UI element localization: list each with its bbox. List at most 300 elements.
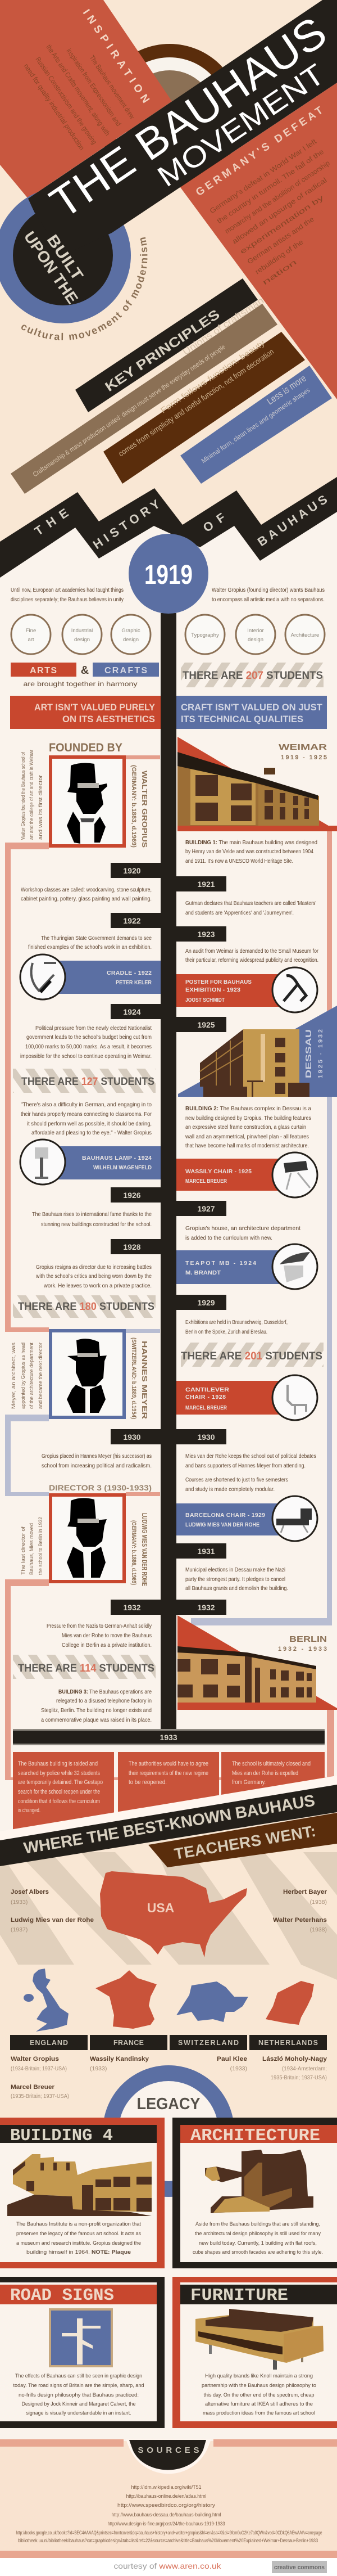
- heading: founded by: FOUNDED BY: [49, 741, 122, 754]
- panel: closure boxes: to be reopened.: [129, 1779, 167, 1786]
- chip: wassily chair: WASSILY CHAIR - 1925: [185, 1168, 252, 1175]
- stat: 201 students: [181, 1343, 324, 1367]
- building 2 text: [185, 1105, 311, 1149]
- text: 1931: Municipal elections in Dessau make the Nazi: [185, 1566, 285, 1573]
- timeline spine: [161, 613, 176, 1735]
- text: 1922: [28, 935, 152, 951]
- names: france: (1933): [90, 2065, 107, 2072]
- country bars: FRANCE: [113, 2039, 144, 2047]
- panel: germany's defeat: nation: [261, 258, 298, 286]
- banner: craft: [176, 696, 327, 729]
- card: architecture: [172, 2118, 337, 2268]
- chip: wassily chair: MARCEL BREUER: [185, 1178, 227, 1185]
- arts and crafts: CRAFTS: [104, 666, 147, 675]
- building 3 text: relegated to a disused telephone factory in: [56, 1697, 152, 1704]
- text: gropius quote: their hands properly means connecting to classrooms. For: [21, 1111, 152, 1118]
- building 3 text: a commemorative plaque was raised in its place.: [41, 1717, 152, 1723]
- year tags left: 1922: [123, 916, 141, 925]
- vertical text: mies notes: the school to Berlin in 1932: [38, 1517, 43, 1575]
- bottom rule: [0, 2551, 337, 2558]
- names: england: [11, 2056, 69, 2100]
- key principles bars: KEY PRINCIPLES: [102, 307, 222, 395]
- chip: bauhaus lamp: BAUHAUS LAMP - 1924: [82, 1155, 152, 1161]
- chip: barcelona chair: [176, 1496, 317, 1541]
- card: building 4: [0, 2118, 165, 2268]
- chip: cantilever chair: CANTILEVER: [185, 1386, 229, 1393]
- text: 1929: Berlin on the Spoke, Zurich and Breslau.: [185, 1328, 267, 1335]
- panel: closure boxes: searched by police while 32 students: [18, 1770, 100, 1777]
- names: switzerland: Paul Klee: [217, 2056, 247, 2062]
- arts and crafts: [11, 663, 159, 688]
- discipline circles: Industrial: [71, 628, 93, 634]
- vertical text: mies notes: Bauhaus, Mies moved: [29, 1523, 34, 1575]
- names: usa left: (1937): [11, 1926, 28, 1933]
- label: weimar: WEIMAR: [279, 742, 327, 752]
- year tags right: 1930: [197, 1433, 215, 1442]
- names: england: (1934-Britain; 1937-USA): [11, 2065, 67, 2072]
- map: france: [95, 1970, 157, 2029]
- vertical text: meyer notes: of the architecture department: [29, 1343, 34, 1409]
- portrait: mies van der rohe: [51, 1495, 124, 1582]
- label: dessau: [304, 1029, 324, 1078]
- hatch backdrop behind map: [0, 1852, 337, 1980]
- year tags left: 1924: [123, 1007, 141, 1016]
- text: source list: http://www.design-is-fine.org/post/24/the-bauhaus-1919-1933: [108, 2521, 225, 2527]
- panel: germany's defeat: [180, 83, 337, 399]
- panel: closure boxes: The authorities would have to agree: [129, 1760, 208, 1767]
- building 2 text: that have become hall marks of modernist architecture.: [185, 1142, 309, 1149]
- chip: poster: EXHIBITION - 1923: [185, 987, 240, 993]
- chip: barcelona chair: BARCELONA CHAIR - 1929: [185, 1512, 265, 1519]
- panel: inspiration: The Bauhaus movement drew: [88, 54, 136, 121]
- title: THE BAUHAUS: [41, 7, 335, 228]
- text: furniture: partnership with the Bauhaus design philosophy to: [202, 2383, 316, 2389]
- text: road signs: no-frills design philosophy that Bauhaus practiced:: [19, 2392, 139, 2398]
- heading band: the history of bauhaus: BAUHAUS: [255, 492, 330, 549]
- text: building 4: a museum and research institute. Gropius designed the: [16, 2240, 141, 2246]
- label: dessau: 1925 - 1932: [317, 1029, 324, 1078]
- names: usa left: Ludwig Mies van der Rohe: [11, 1917, 94, 1924]
- panel: germany's defeat: monarchy and the abolition of censorship: [224, 159, 331, 235]
- discipline circles: design: [123, 637, 139, 643]
- text: gropius quote: "There's also a difficulty in German, and engaging in to: [21, 1101, 152, 1108]
- legacy arch: LEGACY: [137, 2095, 200, 2113]
- banner: art: ON ITS AESTHETICS: [62, 714, 155, 724]
- vertical name: walter gropius: WALTER GROPIUS: [140, 771, 149, 848]
- text: 1930 left: [42, 1453, 152, 1469]
- panel: germany's defeat: GERMANY'S DEFEAT: [194, 105, 325, 199]
- year bar: 1933: 1933: [160, 1733, 177, 1742]
- stat: 114 students: THERE ARE 114 STUDENTS: [18, 1663, 154, 1674]
- panel: inspiration: INSPIRATION: [80, 7, 152, 105]
- vertical name: walter gropius: (GERMANY: b.1883, d.1969): [130, 765, 137, 848]
- text: 1921: and students are 'Apprentices' and 'Journeymen'.: [185, 909, 294, 916]
- text: architecture: new build today. Currently, 1 building with flat roofs,: [199, 2240, 317, 2246]
- vertical text: meyer notes: [11, 1342, 43, 1409]
- vertical text: gropius notes: [20, 750, 43, 840]
- building 3 text: [41, 1688, 152, 1723]
- arts and crafts: &: [81, 664, 89, 677]
- panel: germany's defeat: the country in turmoil. The fall of the: [216, 147, 325, 225]
- stat: 180 students: [13, 1295, 156, 1318]
- text: road signs: [13, 2373, 144, 2416]
- text: 1923: [185, 948, 318, 963]
- panel: closure boxes: The school is ultimately closed and: [232, 1760, 311, 1767]
- text: 1924: [20, 1025, 152, 1060]
- card: road signs: ROAD SIGNS: [10, 2286, 114, 2305]
- year tags left: [111, 863, 161, 1615]
- text: source list: http://www.bauhaus-dessau.de/bauhaus-building.html: [111, 2512, 221, 2518]
- stat: 207 students: THERE ARE 207 STUDENTS: [183, 670, 323, 682]
- panel: inspiration: [0, 0, 172, 199]
- names: netherlands: [262, 2056, 327, 2081]
- stat: 180 students: THERE ARE 180 STUDENTS: [18, 1301, 154, 1313]
- names: netherlands: László Moholy-Nagy: [262, 2056, 327, 2062]
- building: dessau: [178, 1006, 337, 1097]
- text: source list: http://www.speedbirdco.org/org/history: [117, 2502, 216, 2508]
- names: england: Walter Gropius: [11, 2056, 59, 2062]
- card: furniture: [172, 2277, 337, 2428]
- label: weimar: 1919 - 1925: [281, 754, 327, 761]
- title circle: built upon the: BUILT: [44, 231, 86, 283]
- discipline circles: [11, 615, 325, 654]
- building 1 text: BUILDING 1: The main Bauhaus building was designed: [185, 839, 317, 846]
- card: architecture: ARCHITECTURE: [190, 2126, 320, 2146]
- text: 1927: is added to the curriculum with new.: [185, 1235, 272, 1241]
- text: architecture: Aside from the Bauhaus buildings that are still standing,: [195, 2221, 320, 2227]
- text: furniture: mass production ideas from the famous art school: [203, 2410, 315, 2416]
- panel: closure boxes: The Bauhaus building is raided and: [18, 1760, 98, 1767]
- text: 1928: with the school's critics and being worn down by the: [35, 1273, 152, 1280]
- building 2 text: an expressive steel frame construction, a glass curtain: [185, 1124, 306, 1131]
- names: usa right: (1938): [310, 1926, 327, 1933]
- heading band: the history of bauhaus: HISTORY: [90, 497, 162, 552]
- names: france: Wassily Kandinsky: [90, 2056, 149, 2062]
- text: source list: http://idm.wikipedia.org/wiki/T51: [131, 2484, 201, 2490]
- vertical name: hannes meyer: (SWITZERLAND: b.1889, d.1954): [130, 1337, 137, 1419]
- panel: germany's defeat: German artists and the: [246, 215, 316, 265]
- frames: coloured border lines: [5, 755, 334, 1780]
- heading band: the history of bauhaus: OF: [201, 510, 228, 535]
- year tags left: 1926: [123, 1191, 141, 1200]
- building 3 text: BUILDING 3: The Bauhaus operations are: [58, 1688, 152, 1695]
- vertical name: mies: LUDWIG MIES VAN DER ROHE: [140, 1513, 149, 1586]
- text: 1930 right: and bans supporters of Hannes Meyer from attending.: [185, 1462, 306, 1469]
- building 3 text: Steglitz, Berlin. The building no longer exists and: [41, 1707, 152, 1714]
- building: weimar: [177, 737, 337, 831]
- names: netherlands: (1934-Amsterdam;: [282, 2065, 327, 2072]
- text: building 4: building himself in 1964. NOTE: Plaque: [26, 2249, 131, 2255]
- heading band: the history of bauhaus: THE: [32, 506, 71, 538]
- vertical name: hannes meyer: [130, 1337, 149, 1420]
- text: 1932: Pressure from the Nazis to German-Anhalt solidly: [47, 1623, 152, 1629]
- legacy arch: [103, 2065, 234, 2197]
- panel: closure boxes: [13, 1752, 325, 1834]
- text: 1930 right: [185, 1453, 316, 1493]
- chip: poster: POSTER FOR BAUHAUS: [185, 979, 252, 985]
- stat: 207 students: [181, 663, 324, 687]
- text: 1932: Mies van der Rohe to move the Bauhaus: [62, 1632, 152, 1639]
- vertical name: mies: [130, 1513, 149, 1586]
- chip: cantilever chair: CHAIR - 1928: [185, 1394, 226, 1400]
- text: architecture: cube shapes and smooth facades are adhering to this style.: [193, 2249, 323, 2255]
- banner: art: [10, 696, 161, 729]
- names: usa left: (1933): [11, 1899, 28, 1906]
- year tags left: 1928: [123, 1242, 141, 1251]
- key principles bars: Form follows function: beauty: [159, 338, 266, 415]
- vertical text: mies notes: The last director of: [20, 1526, 26, 1575]
- text: 1932: [47, 1623, 152, 1649]
- map: england: [24, 1969, 69, 2032]
- country bars: [10, 2035, 327, 2050]
- label: berlin: BERLIN: [289, 1634, 327, 1644]
- names: usa right: (1938): [310, 1899, 327, 1906]
- text: 1928: Gropius resigns as director due to increasing battles: [36, 1264, 152, 1271]
- text: building 4: preserves the legacy of the famous art school. It acts as: [16, 2231, 141, 2237]
- card: building 4: BUILDING 4: [10, 2126, 113, 2146]
- text: 1929: Exhibitions are held in Braunschweig, Dusseldorf,: [185, 1319, 288, 1326]
- discipline circles: design: [74, 637, 90, 643]
- key principles bars: comes from simplicity and useful function, not from decoration: [117, 347, 275, 458]
- building 1 text: [185, 839, 317, 864]
- map: switzerland: [176, 1981, 248, 2022]
- year tags right: [175, 876, 226, 1615]
- credit line: courtesy of www.aren.co.uk: [113, 2561, 222, 2570]
- panel: inspiration: Russian Constructivism and the growing: [34, 56, 98, 146]
- year tags left: 1930: [123, 1433, 141, 1442]
- year tags right: 1929: [197, 1298, 215, 1307]
- discipline circles: Graphic: [121, 628, 140, 634]
- banner: craft: ITS TECHNICAL QUALITIES: [181, 714, 303, 724]
- text: furniture: alternative furniture at IKEA still adheres to the: [205, 2401, 313, 2407]
- text: gropius quote: it should perform well as possible, it should be daring,: [27, 1120, 152, 1127]
- band: where the best-known bauhaus teachers went: TEACHERS WENT:: [173, 1822, 317, 1863]
- discipline circles: Architecture: [291, 632, 319, 638]
- vertical name: mies: (GERMANY: b.1886, d.1969): [130, 1520, 137, 1585]
- chip: cantilever chair: [176, 1375, 317, 1420]
- discipline circles: Typography: [191, 632, 219, 638]
- stat: 114 students: [13, 1655, 156, 1679]
- text: 1927: Gropius's house, an architecture department: [185, 1225, 300, 1232]
- banner: art: ART ISN'T VALUED PURELY: [34, 702, 156, 713]
- discipline circles: art: [28, 637, 34, 643]
- stat: 201 students: THERE ARE 201 STUDENTS: [181, 1350, 322, 1362]
- text: building 4: The Bauhaus Institute is a non-profit organization that: [16, 2221, 141, 2227]
- panel: inspiration: the Arts and Crafts movement, along with: [45, 43, 112, 137]
- text: gropius quote: affordable and pleasing to the eye." - Walter Gropius: [31, 1129, 152, 1136]
- title: MOVEMENT: [152, 58, 331, 193]
- stat: 127 students: THERE ARE 127 STUDENTS: [21, 1076, 154, 1088]
- chip: cradle: PETER KELER: [116, 979, 152, 986]
- text: road signs: The effects of Bauhaus can still be seen in graphic design: [15, 2373, 142, 2379]
- text: 1931: party the strongest party. It pledges to cancel: [185, 1576, 285, 1583]
- text: 1930 left: Gropius placed in Hannes Meyer (his successor) as: [42, 1453, 152, 1460]
- chip: barcelona chair: LUDWIG MIES VAN DER ROHE: [185, 1521, 259, 1528]
- intro text left: [11, 587, 124, 603]
- year tags right: 1923: [197, 930, 215, 939]
- text: 1926: The Bauhaus rises to international fame thanks to the: [32, 1211, 152, 1218]
- text: 1931: all Bauhaus grants and demolish the building.: [185, 1585, 288, 1592]
- vertical name: hannes meyer: HANNES MEYER: [140, 1341, 149, 1420]
- building 1 text: by Henry van de Velde and was constructed between 1904: [185, 848, 313, 855]
- vertical name: walter gropius: [130, 765, 149, 848]
- building 2 text: BUILDING 2: The Bauhaus complex in Dessau is a: [185, 1105, 311, 1112]
- chip: cantilever chair: MARCEL BREUER: [185, 1404, 227, 1411]
- chip: bauhaus lamp: WILHELM WAGENFELD: [93, 1164, 152, 1171]
- year tags right: 1921: [197, 880, 215, 889]
- text: 1924: government leads to the school's budget being cut from: [26, 1034, 152, 1041]
- building 1 text: and 1911. It's now a UNESCO World Heritage Site.: [185, 858, 293, 864]
- names: netherlands: 1935-Britain; 1937-USA): [271, 2074, 327, 2081]
- building 2 text: wall and an asymmetrical, pinwheel plan - all features: [185, 1133, 309, 1140]
- licence badge: [272, 2561, 327, 2573]
- year tags right: 1927: [197, 1204, 215, 1213]
- label: berlin: [278, 1634, 327, 1652]
- sources header: SOURCES: [138, 2446, 199, 2455]
- chip: wassily chair: [176, 1152, 317, 1197]
- intro text right: [212, 587, 325, 603]
- band: where the best-known bauhaus teachers went: WHERE THE BEST-KNOWN BAUHAUS: [22, 1792, 316, 1858]
- vertical text: meyer notes: and became the next director: [38, 1343, 43, 1409]
- text: architecture: the architectural design philosophy is still used for many: [195, 2231, 321, 2237]
- year tags right: 1925: [197, 1020, 215, 1029]
- text: gropius quote: [21, 1101, 152, 1136]
- map: usa: USA: [147, 1901, 174, 1915]
- chip: poster: [176, 967, 317, 1012]
- chip: teapot: M. BRANDT: [185, 1269, 221, 1276]
- text: 1924: 100,000 marks to 50,000 marks. As a result, it becomes: [25, 1043, 152, 1050]
- label: director 3: DIRECTOR 3 (1930-1933): [49, 1483, 152, 1492]
- panel: germany's defeat: Germany's defeat in World War I left: [208, 137, 318, 215]
- banner: craft: CRAFT ISN'T VALUED ON JUST: [181, 702, 323, 713]
- map: usa: [100, 1871, 247, 1957]
- text: 1926: stunning new buildings constructed for the school.: [41, 1221, 152, 1228]
- vertical text: gropius notes: art and the college of art and craft in Weimar: [29, 750, 34, 840]
- heading band: the history of bauhaus: [0, 477, 337, 578]
- key principles bars: Unions of craftsman: [181, 295, 266, 357]
- key principles bars: [11, 278, 332, 494]
- text: 1931: [185, 1566, 288, 1592]
- text: furniture: [202, 2373, 316, 2416]
- vertical text: meyer notes: appointed by Gropius as head: [20, 1343, 26, 1409]
- text: 1922: finished examples of the school's work in an exhibition.: [28, 944, 152, 951]
- text: 1930 right: Courses are shortened to just to five semesters: [185, 1476, 288, 1483]
- arts and crafts: ARTS: [30, 666, 57, 675]
- key principles bars: Less is more: [265, 373, 308, 407]
- text: 1929: [185, 1319, 288, 1335]
- label: weimar: [279, 742, 327, 761]
- panel: closure boxes: condition that it follows the curriculum: [18, 1798, 100, 1805]
- intro text left: Until now, European art academies had taught things: [11, 587, 124, 593]
- text: 1928: [35, 1264, 152, 1289]
- discipline circles: Fine: [26, 628, 36, 634]
- year tags right: 1932: [197, 1603, 215, 1612]
- text: furniture: High quality brands like Knoll maintain a strong: [205, 2373, 313, 2379]
- panel: closure boxes: Mies van der Rohe is expelled: [232, 1770, 298, 1777]
- text: 1924: impossible for the school to continue operating in Weimar.: [20, 1053, 152, 1060]
- licence badge: creative commons: [274, 2564, 325, 2571]
- year tags left: 1932: [123, 1603, 141, 1612]
- chip: cradle: [20, 954, 161, 999]
- building 2 text: new building designed by Gropius. The building features: [185, 1115, 311, 1122]
- panel: closure boxes: search for the school reopen under the: [18, 1789, 100, 1795]
- panel: inspiration: inspiration from Expressionism and: [65, 47, 122, 128]
- names: switzerland: [217, 2056, 247, 2072]
- names: usa left: Josef Albers: [11, 1889, 49, 1895]
- card: road signs: [0, 2277, 165, 2428]
- text: 1930 left: school from increasing political and radicalism.: [42, 1462, 152, 1469]
- panel: inspiration: need for quality industrial production: [22, 62, 86, 152]
- discipline circles: Interior: [247, 628, 264, 634]
- vertical text: mies notes: [20, 1517, 43, 1575]
- label: berlin: 1932 - 1933: [278, 1646, 327, 1652]
- chip: teapot: TEAPOT MB - 1924: [185, 1260, 256, 1267]
- text: 1932: College in Berlin as a private institution.: [62, 1642, 152, 1649]
- names: france: [90, 2056, 149, 2072]
- panel: closure boxes: is changed.: [18, 1807, 40, 1814]
- text: road signs: signage is visually understandable in an instant.: [26, 2410, 131, 2416]
- names: usa right: Walter Peterhans: [273, 1917, 327, 1924]
- sources header: [0, 2439, 337, 2474]
- text: road signs: today. The road signs of Britain are the simple, sharp, and: [13, 2383, 144, 2389]
- panel: closure boxes: their requirements of the new regime: [129, 1770, 208, 1777]
- intro text left: disciplines separately; the Bauhaus believes in unity: [11, 596, 124, 603]
- subtitle: cultural movement of modernism: cultural movement of modernism: [21, 237, 147, 340]
- names: usa right: [273, 1889, 327, 1933]
- year circle: 1919: [129, 534, 208, 614]
- country bars: NETHERLANDS: [258, 2039, 318, 2047]
- key principles bars: Craftsmanship & mass production united: design must serve the everyday needs of people: [31, 343, 227, 478]
- vertical text: gropius notes: and was its first director: [38, 775, 43, 840]
- text: 1927: [185, 1225, 300, 1241]
- text: 1920: [21, 886, 152, 902]
- country bars: ENGLAND: [30, 2039, 68, 2047]
- year circle: 1919: 1919: [144, 560, 193, 590]
- year tags right: 1931: [197, 1547, 215, 1556]
- names: england: Marcel Breuer: [11, 2084, 55, 2091]
- map: netherlands: [266, 1981, 314, 2025]
- panel: germany's defeat: allowed an upsurge of radical: [231, 176, 328, 245]
- text: 1930 right: Mies van der Rohe keeps the school out of political debates: [185, 1453, 316, 1460]
- text: 1930 right: and study is made completely modular.: [185, 1486, 275, 1493]
- chip: teapot: [176, 1244, 317, 1289]
- panel: germany's defeat: rebuilding of the: [254, 238, 305, 276]
- portrait: hannes meyer: [51, 1331, 124, 1417]
- names: usa left: [11, 1889, 94, 1933]
- text: road signs: Designed by Jock Kinneir and Margaret Calvert, the: [21, 2401, 136, 2407]
- panel: closure boxes: from Germany.: [232, 1779, 266, 1786]
- stat: 127 students: [13, 1069, 156, 1093]
- panel: germany's defeat: experimentation by: [239, 193, 326, 255]
- band: where the best-known bauhaus teachers went: [0, 1776, 337, 1867]
- title circle: built upon the: [0, 0, 337, 323]
- names: usa right: Herbert Bayer: [283, 1889, 327, 1895]
- text: 1928: work. He leaves to work on a private practice.: [43, 1282, 152, 1289]
- label: dessau: DESSAU: [304, 1029, 313, 1078]
- card: furniture: FURNITURE: [190, 2286, 288, 2305]
- icon: concentric arch behind title: [98, 44, 242, 188]
- building: berlin: [177, 1615, 337, 1710]
- discipline circles: design: [248, 637, 263, 643]
- vertical text: meyer notes: Meyer, an architect, was: [11, 1342, 16, 1409]
- text: 1926: [32, 1211, 152, 1228]
- names: england: (1935-Britain; 1937-USA): [11, 2093, 69, 2100]
- portrait: walter gropius: [51, 757, 124, 846]
- names: switzerland: (1933): [230, 2065, 247, 2072]
- chip: bauhaus lamp: [20, 1140, 161, 1185]
- vertical text: gropius notes: Walter Gropius founded the Bauhaus school of: [20, 752, 26, 840]
- text: 1922: The Thuringian State Government demands to see: [41, 935, 152, 942]
